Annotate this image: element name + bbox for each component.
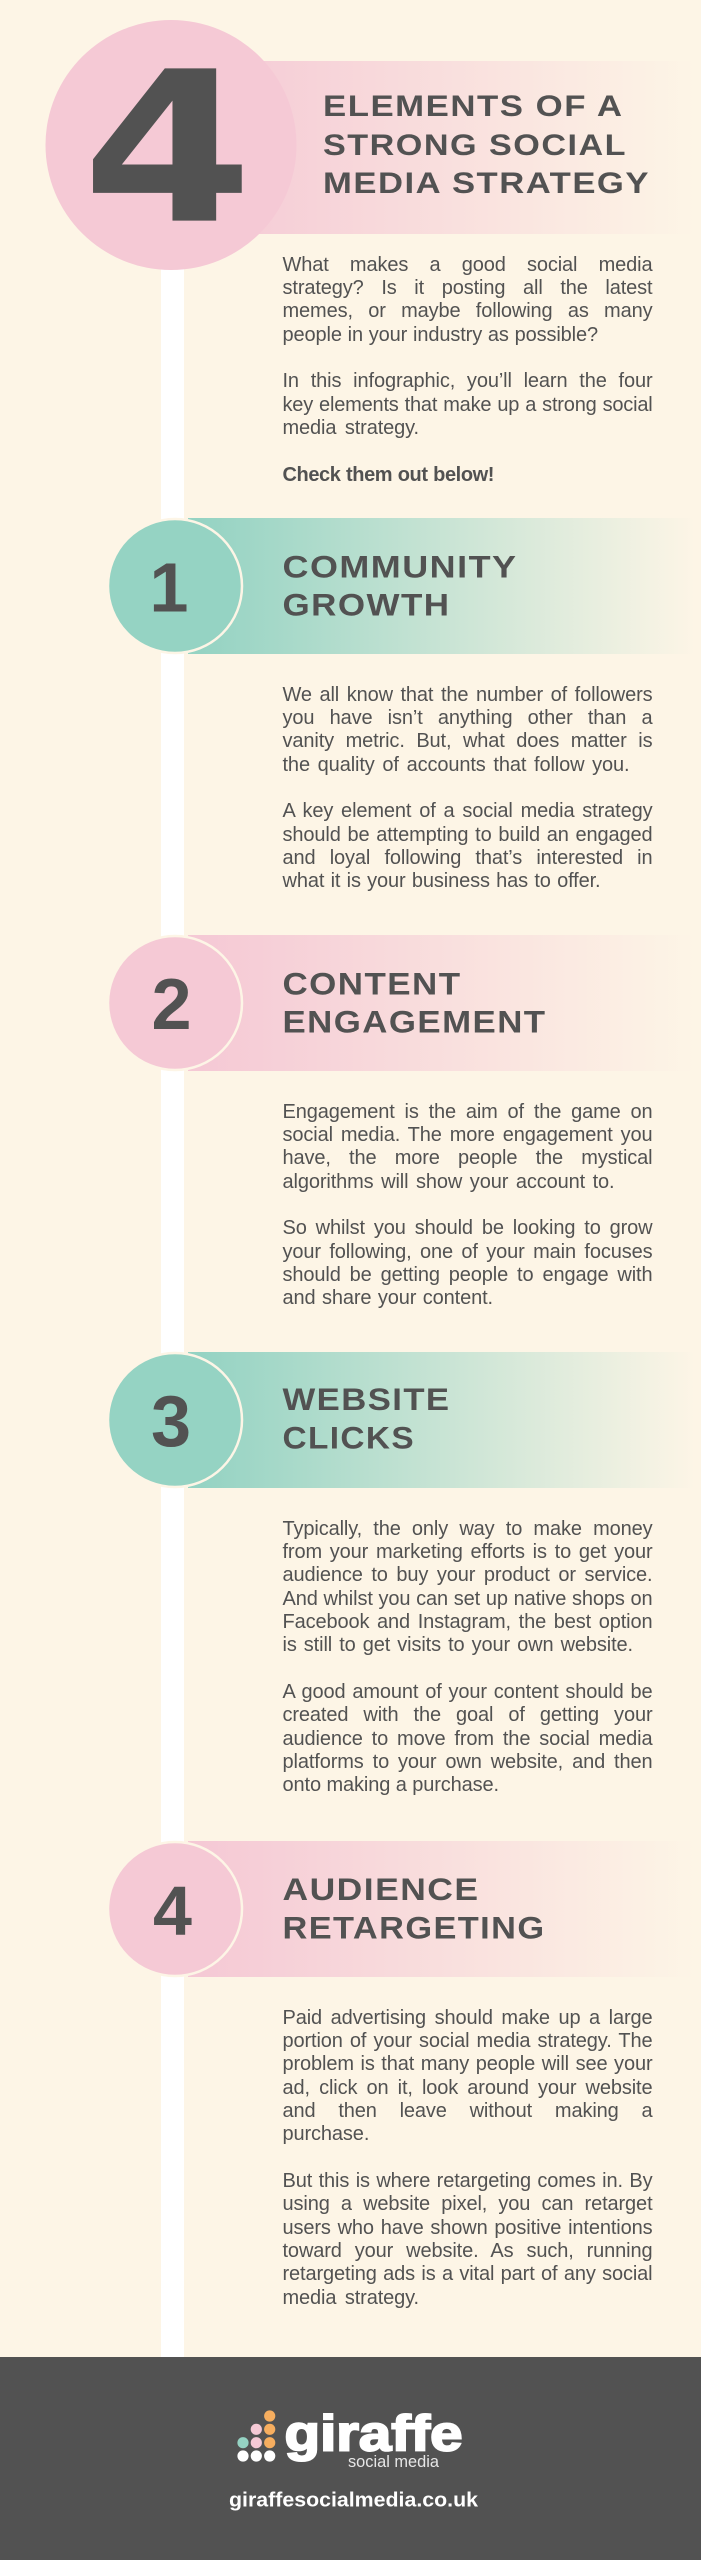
heading 1 [282,548,518,623]
heading 2 [282,965,546,1040]
intro text: Check them out below! [282,464,494,486]
heading 2: CONTENT [282,965,462,1001]
hero number 4: 4 [82,26,253,270]
number 4: 4 [153,1872,192,1950]
heading 4: RETARGETING [282,1909,546,1945]
band 2 [188,935,695,1071]
section 4 body text [282,2007,653,2309]
section 1 body text: you have isn’t anything other than a [282,707,652,729]
heading 3 [282,1381,450,1455]
logo subtitle: social media [348,2452,440,2471]
section 3 body text: from your marketing efforts is to get your [282,1541,652,1563]
section 3 body text [282,1518,653,1796]
section 4 body text: users who have shown positive intentions [282,2217,652,2239]
timeline pole [161,200,184,2360]
number 2: 2 [151,965,192,1045]
heading 4: AUDIENCE [282,1871,480,1907]
section 3 body text: audience to buy your product or service. [282,1564,652,1586]
band 4 [188,1841,695,1977]
intro text [282,254,653,486]
logo wordmark: giraffe [284,2406,462,2462]
intro text: key elements that make up a strong social [282,394,652,416]
section 3 body text: audience to move from the social media [282,1728,652,1750]
band 1 [188,518,695,654]
section 3 body text: And whilst you can set up native shops on [282,1588,652,1610]
main title [323,90,650,200]
intro text: What makes a good social media [282,254,652,276]
intro text: strategy? Is it posting all the latest [282,277,652,299]
heading 1: COMMUNITY [282,548,518,584]
footer background [0,2357,701,2560]
section 4 body text: purchase. [282,2123,369,2145]
section 4 body text: portion of your social media strategy. The [282,2030,652,2052]
hero banner [240,61,695,234]
section 2 body text: should be getting people to engage with [282,1264,652,1286]
section 1 body text: the quality of accounts that follow you. [282,754,630,776]
intro text: media strategy. [282,417,419,439]
circle 1 [108,519,242,653]
circle 3 [108,1353,242,1487]
circle 2 [108,936,242,1070]
section 4 header: audience retargeting [108,1841,695,1977]
section 2 body text: social media. The more engagement you [282,1124,652,1146]
section 4 body text: and then leave without making a [282,2100,652,2122]
intro text: memes, or maybe following as many [282,300,652,322]
section 4 body text: using a website pixel, you can retarget [282,2193,652,2215]
section 2 body text: and share your content. [282,1287,493,1309]
section 1 body text: A key element of a social media strategy [282,800,652,822]
footer [0,2357,701,2560]
main title: ELEMENTS OF A [323,90,624,123]
section 1 body text: should be attempting to build an engaged [282,824,652,846]
section 1 body text: what it is your business has to offer. [282,870,600,892]
section 3 body text: A good amount of your content should be [282,1681,652,1703]
section 4 body text: toward your website. As such, running [282,2240,652,2262]
section 4 body text: problem is that many people will see your [282,2053,652,2075]
heading 3: CLICKS [282,1419,415,1455]
section 4 body text: retargeting ads is a vital part of any social [282,2263,652,2285]
section 2 body text: algorithms will show your account to. [282,1171,614,1193]
section 3 header: website clicks [108,1352,695,1488]
main title: STRONG SOCIAL [323,129,627,162]
hero circle [46,20,296,270]
section 1 body text [282,684,653,892]
section 3 body text: platforms to your own website, and then [282,1751,652,1773]
section 4 body text: Paid advertising should make up a large [282,2007,652,2029]
number 1: 1 [150,549,188,627]
section 3 body text: Typically, the only way to make money [282,1518,652,1540]
heading 3: WEBSITE [282,1381,450,1417]
section 1 body text: We all know that the number of followers [282,684,652,706]
heading 2: ENGAGEMENT [282,1004,546,1040]
section 4 body text: media strategy. [282,2287,419,2309]
section 1 body text: and loyal following that’s interested in [282,847,652,869]
circle 4 [108,1842,242,1976]
main title: MEDIA STRATEGY [323,167,650,200]
section 2 body text [282,1101,653,1309]
section 2 body text: Engagement is the aim of the game on [282,1101,652,1123]
section 2 body text: have, the more people the mystical [282,1147,652,1169]
section 2 header: content engagement [108,935,695,1071]
intro text: In this infographic, you’ll learn the four [282,370,652,392]
intro text: people in your industry as possible? [282,324,598,346]
section 1 body text: vanity metric. But, what does matter is [282,730,652,752]
website url: giraffesocialmedia.co.uk [229,2488,479,2512]
section 3 body text: created with the goal of getting your [282,1704,652,1726]
section 2 body text: So whilst you should be looking to grow [282,1217,652,1239]
section 4 body text: ad, click on it, look around your website [282,2077,652,2099]
heading 1: GROWTH [282,587,450,623]
section 1 header: community growth [108,518,695,654]
section 3 body text: onto making a purchase. [282,1774,499,1796]
section 2 body text: your following, one of your main focuses [282,1241,652,1263]
section 3 body text: is still to get visits to your own website. [282,1634,633,1656]
heading 4 [282,1871,546,1945]
band 3 [188,1352,695,1488]
hero header [46,20,695,270]
logo dots icon [237,2410,275,2462]
section 3 body text: Facebook and Instagram, the best option [282,1611,652,1633]
number 3: 3 [151,1382,191,1462]
section 4 body text: But this is where retargeting comes in. By [282,2170,652,2192]
